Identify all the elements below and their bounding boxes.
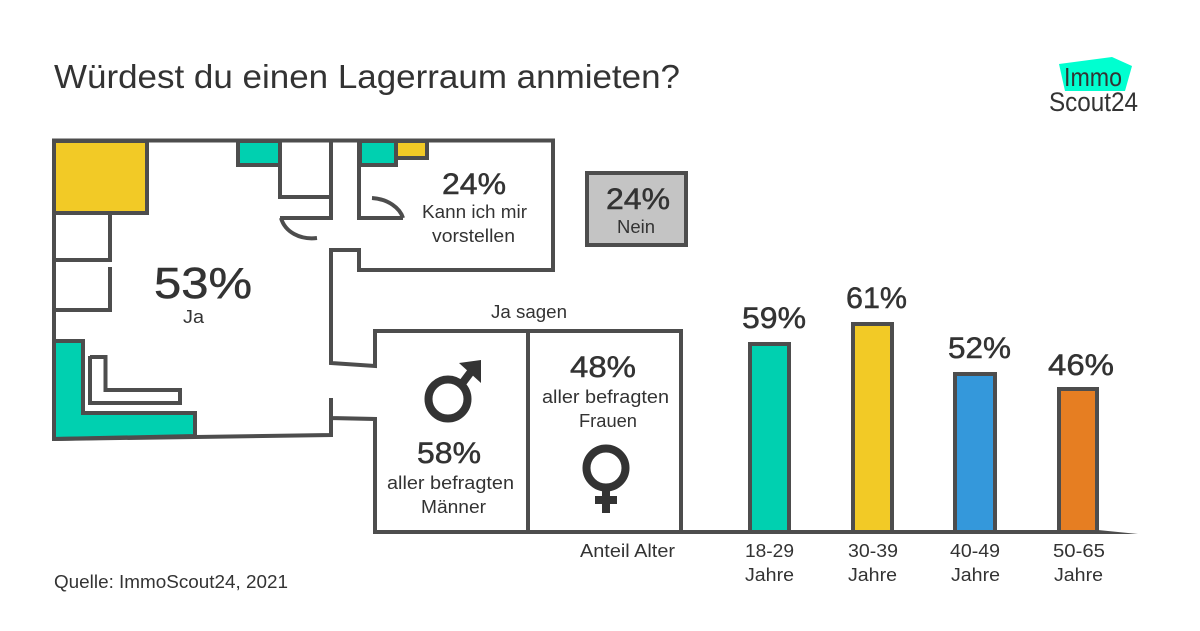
label: 53% Ja: Ja: [183, 307, 205, 327]
logo: ImmoScout24: [1049, 57, 1138, 117]
panel: men: 58%: [417, 437, 481, 470]
heading: Ja sagen: Ja sagen: [491, 302, 567, 322]
interior walls: [54, 140, 528, 532]
door arcs: [281, 198, 403, 238]
panel: women: [542, 351, 669, 513]
storage: teal right: [360, 141, 396, 165]
source: Quelle: ImmoScout24, 2021: [54, 572, 288, 592]
bar 18-29: 59%: [742, 302, 806, 335]
label: 24% Kann ich mir vorstellen: vorstellen: [432, 226, 515, 246]
bar 30-39: 30-39: [848, 541, 898, 561]
panel: women: aller befragten: [542, 387, 669, 407]
storage: teal L-shaped: [54, 341, 195, 439]
bar 40-49: [948, 332, 1011, 585]
panel: men: aller befragten: [387, 473, 514, 493]
label: 24% Kann ich mir vorstellen: 24%: [442, 168, 506, 201]
bar 30-39: Jahre: [848, 565, 897, 585]
panel: floor plan: [54, 140, 681, 532]
panel: women: Frauen: [579, 411, 637, 431]
storage: yellow small: [396, 141, 427, 158]
storage: teal top: [238, 141, 280, 165]
bar 18-29: [742, 302, 806, 585]
outer walls: [54, 140, 681, 532]
label: 24% Kann ich mir vorstellen: [422, 168, 527, 246]
bar 50-65: 50-65: [1053, 541, 1105, 561]
bar chart: age: [375, 282, 1138, 585]
label: 53% Ja: 53%: [154, 259, 252, 308]
panel: men: [387, 360, 514, 517]
storage: yellow large: [54, 141, 147, 213]
axis label: Anteil Alter: Anteil Alter: [580, 541, 675, 561]
logo: ImmoScout24: Immo: [1064, 62, 1122, 92]
label: 24% Kann ich mir vorstellen: Kann ich mir: [422, 202, 527, 222]
bar 50-65: Jahre: [1054, 565, 1103, 585]
icon: female symbol: [586, 448, 626, 513]
axis baseline: [375, 530, 1138, 534]
bar 50-65: 46%: [1048, 349, 1114, 382]
panel: 24% Nein: [587, 173, 686, 245]
panel: 24% Nein: Nein: [617, 217, 655, 237]
bar 40-49: Jahre: [951, 565, 1000, 585]
bar 40-49: 40-49: [950, 541, 1000, 561]
panel: women: 48%: [570, 351, 636, 384]
label: 53% Ja: [154, 259, 252, 327]
bar 50-65: [1048, 349, 1114, 585]
title: Würdest du einen Lagerraum anmieten?: [54, 58, 680, 95]
panel: men: Männer: [421, 497, 486, 517]
bar 18-29: 18-29: [745, 541, 794, 561]
bar 30-39: [846, 282, 907, 585]
logo: ImmoScout24: Scout24: [1049, 87, 1138, 117]
bar 18-29: Jahre: [745, 565, 794, 585]
icon: male symbol: [428, 360, 481, 418]
panel: 24% Nein: 24%: [606, 183, 670, 216]
bar 40-49: 52%: [948, 332, 1011, 365]
bar 30-39: 61%: [846, 282, 907, 315]
